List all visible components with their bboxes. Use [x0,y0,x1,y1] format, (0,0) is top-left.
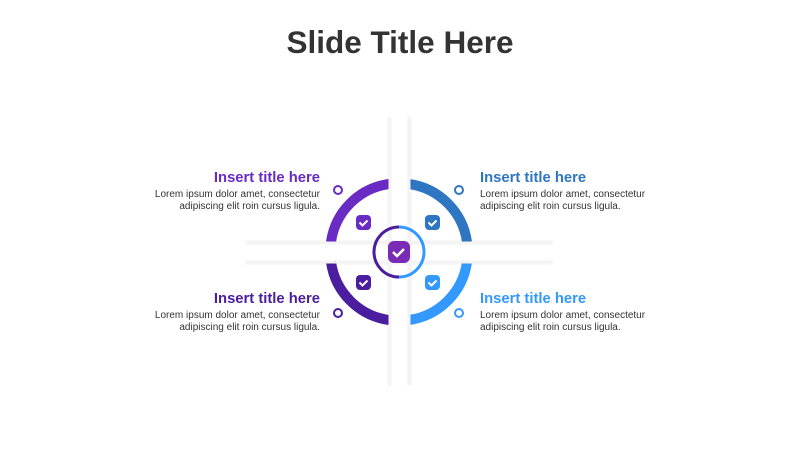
text: top-left: Lorem ipsum dolor amet, consectetur [155,189,320,200]
text: bottom-left: adipiscing elit roin cursus ligula. [179,322,320,333]
gray cross lines [246,117,552,385]
text: bottom-right [480,291,645,333]
text: bottom-left: Insert title here [214,291,320,307]
center ring [374,227,424,277]
icon: checks [356,215,440,290]
text: bottom-right: Insert title here [480,291,586,307]
text: bottom-right: adipiscing elit roin cursus ligula. [480,322,621,333]
text: bottom-left: Lorem ipsum dolor amet, consectetur [155,310,320,321]
text: top-right: adipiscing elit roin cursus ligula. [480,201,621,212]
ring: top-right [409,184,467,242]
text: top-right: Insert title here [480,170,586,186]
text: bottom-right: Lorem ipsum dolor amet, consectetur [480,310,645,321]
text: top-right: Lorem ipsum dolor amet, consectetur [480,189,645,200]
text: top-left: Insert title here [214,170,320,186]
ring: bottom-right [409,262,467,320]
ring: top-left [331,184,389,242]
text: top-right [480,170,645,212]
text: top-left: adipiscing elit roin cursus ligula. [179,201,320,212]
ring: bottom-left [331,262,389,320]
icon: small circles [334,186,463,317]
title: Slide Title Here [286,24,514,60]
text: bottom-left [155,291,320,333]
icon: center check [388,241,410,263]
text: top-left [155,170,320,212]
